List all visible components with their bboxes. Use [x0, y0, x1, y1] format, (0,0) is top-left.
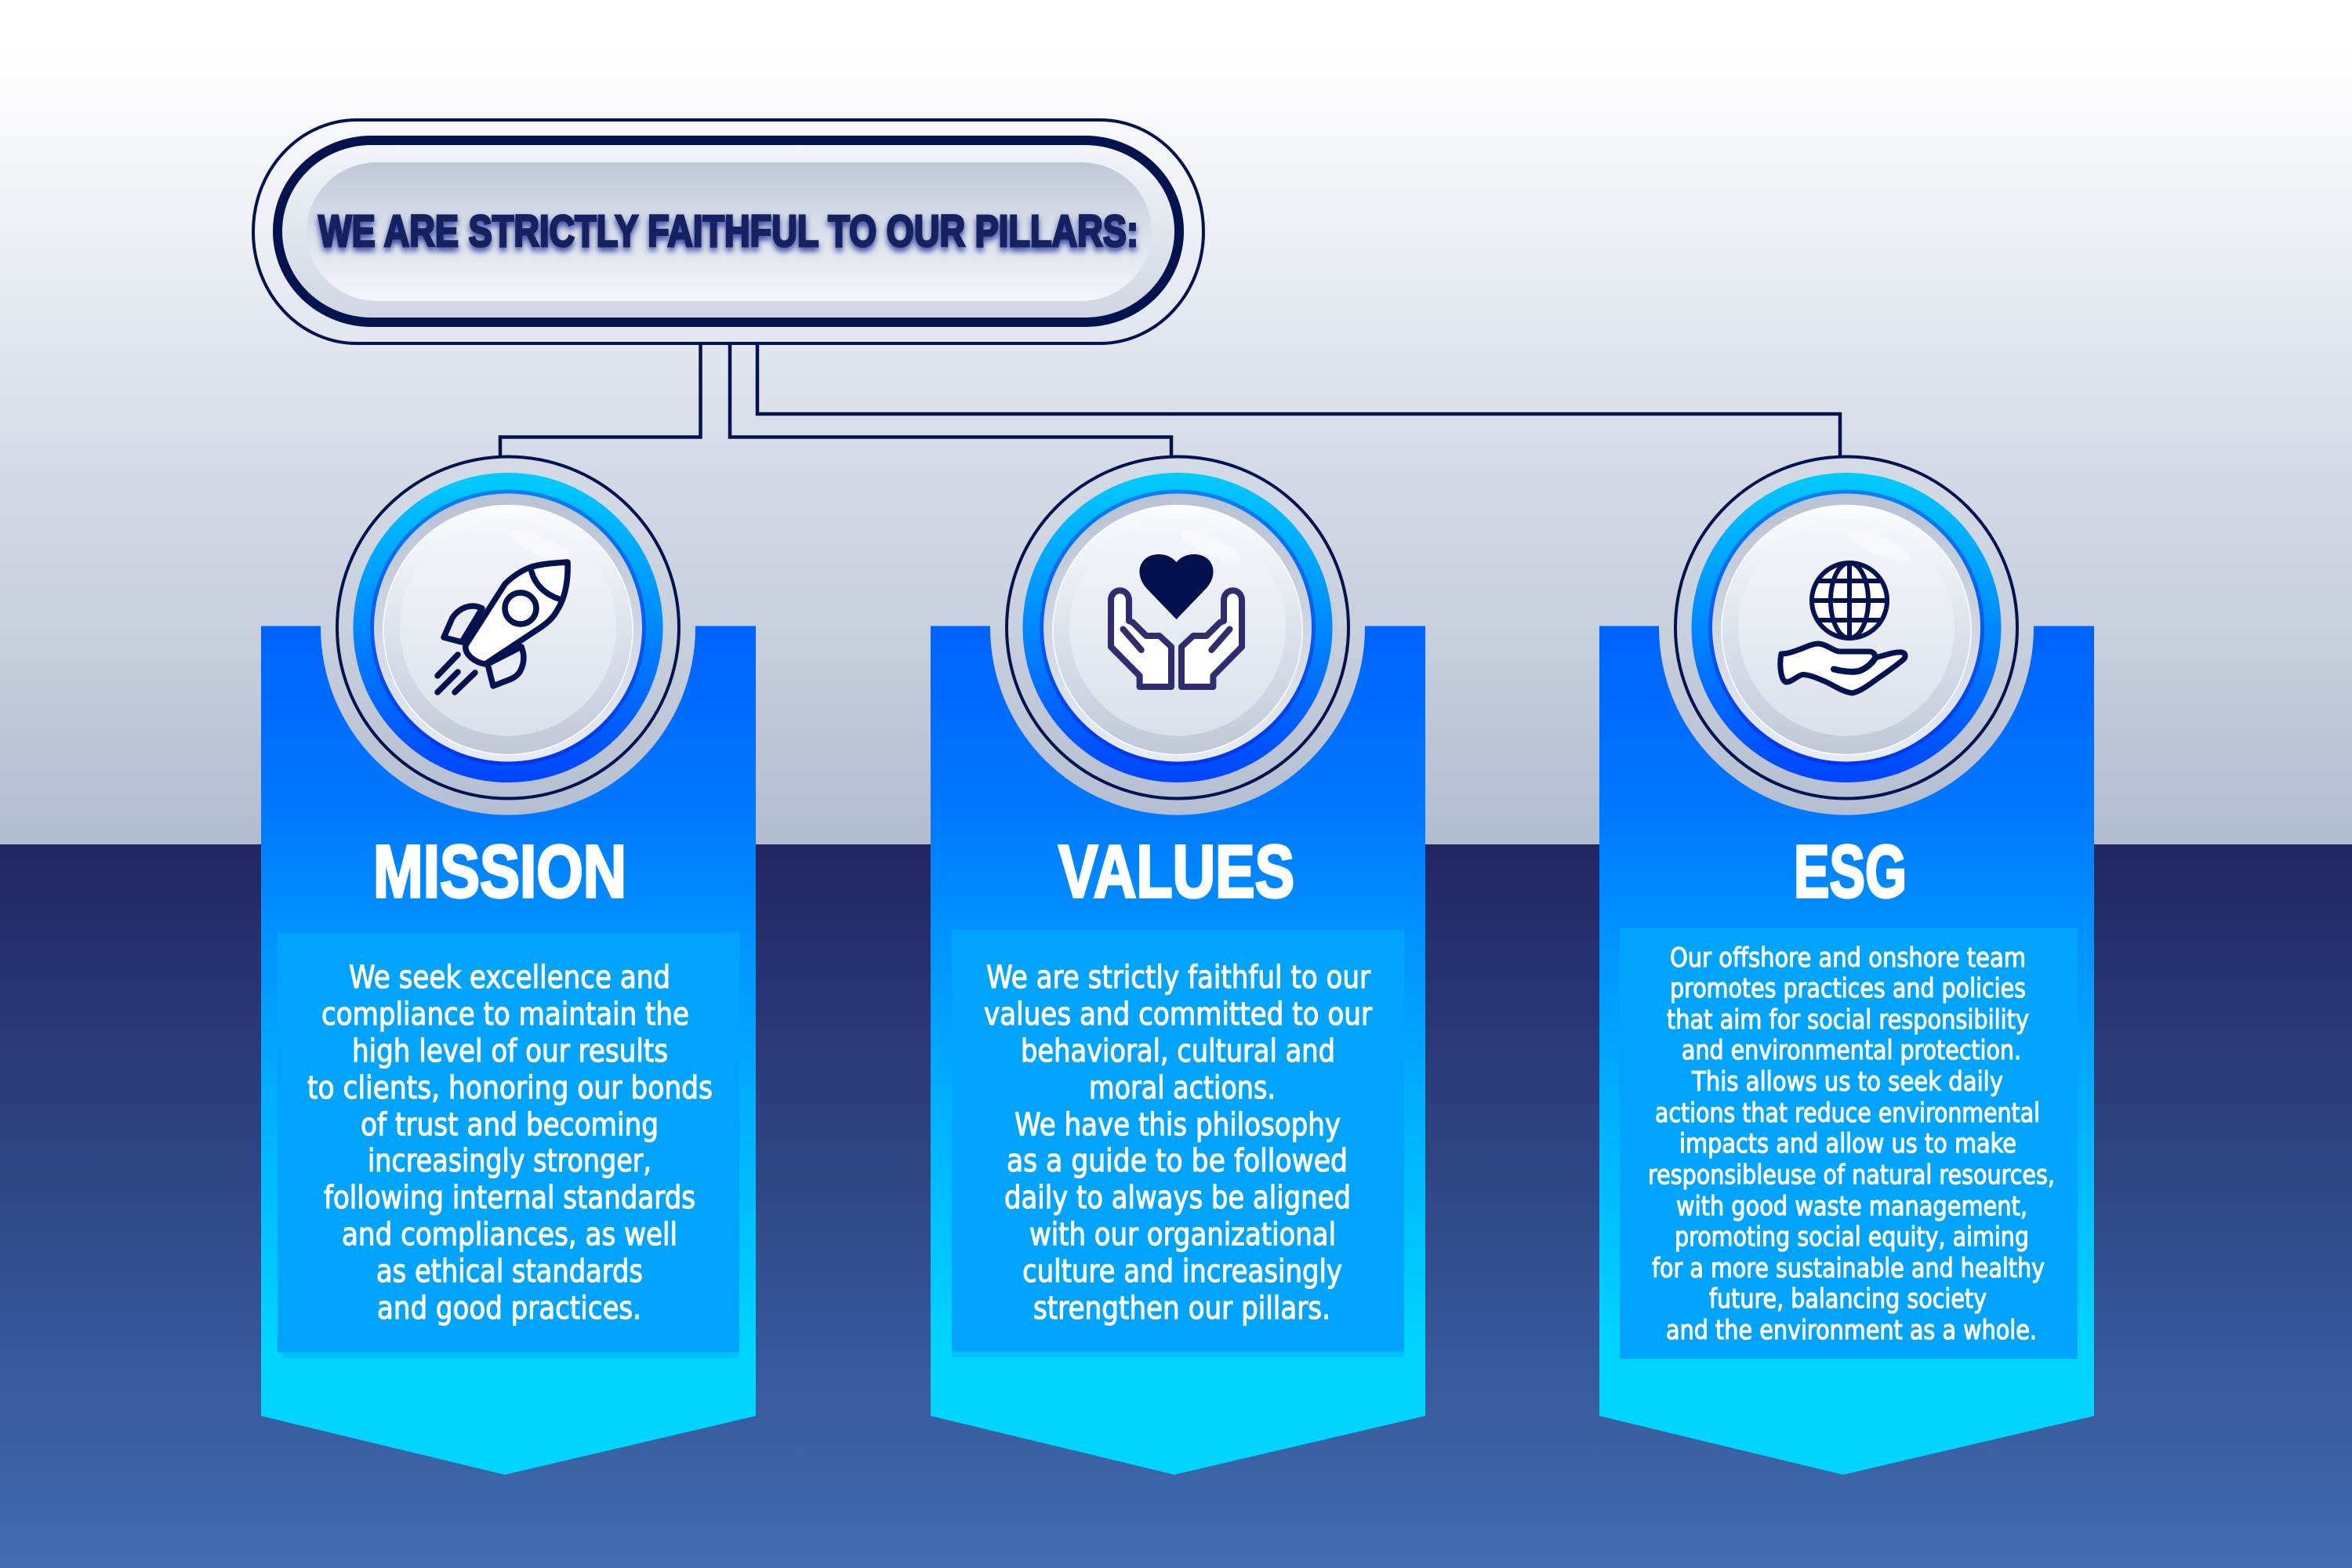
icon: rocket — [437, 562, 568, 692]
esg text panel: impacts and allow us to make — [1679, 1128, 2016, 1160]
values text panel: We have this philosophy — [1014, 1107, 1341, 1143]
mission heading: MISSION — [373, 830, 626, 913]
esg text panel: with good waste management, — [1676, 1191, 2027, 1222]
esg text panel: future, balancing society — [1709, 1283, 1987, 1315]
esg text panel: actions that reduce environmental — [1655, 1098, 2040, 1129]
connector lines from title to pillars — [500, 342, 1840, 458]
esg text panel: promotes practices and policies — [1670, 973, 2026, 1004]
mission text panel: to clients, honoring our bonds — [307, 1070, 713, 1106]
mission notch — [321, 441, 695, 815]
background: light upper band — [0, 0, 2352, 844]
esg text panel: and the environment as a whole. — [1666, 1315, 2037, 1346]
esg text panel — [1620, 928, 2078, 1359]
icon: heart in hands — [1111, 554, 1242, 687]
panel: mission — [261, 441, 756, 1475]
values text panel: as a guide to be followed — [1007, 1143, 1348, 1179]
mission banner — [261, 626, 756, 1475]
mission text panel: following internal standards — [324, 1180, 695, 1216]
values heading: VALUES — [1058, 830, 1294, 913]
esg heading: ESG — [1794, 830, 1907, 913]
esg text panel: This allows us to seek daily — [1691, 1066, 2003, 1098]
values banner — [931, 626, 1425, 1475]
esg text panel: that aim for social responsibility — [1667, 1004, 2029, 1036]
esg text panel: Our offshore and onshore team — [1670, 942, 2026, 974]
esg notch — [1659, 441, 2034, 815]
values notch — [990, 441, 1365, 815]
mission text panel: high level of our results — [352, 1033, 668, 1069]
esg text panel: for a more sustainable and healthy — [1652, 1253, 2045, 1284]
mission badge — [337, 456, 679, 798]
title pill — [253, 120, 1203, 343]
values text panel: We are strictly faithful to our — [986, 960, 1370, 996]
mission text panel: increasingly stronger, — [368, 1143, 652, 1179]
values badge — [1007, 456, 1348, 798]
mission text panel: as ethical standards — [376, 1254, 643, 1290]
values text panel: with our organizational — [1029, 1217, 1336, 1253]
mission text panel: We seek excellence and — [349, 960, 670, 996]
mission text panel: and compliances, as well — [342, 1217, 677, 1253]
panel: esg — [1599, 441, 2094, 1475]
values text panel: values and committed to our — [984, 996, 1372, 1033]
mission text panel: and good practices. — [377, 1290, 641, 1327]
values text panel: daily to always be aligned — [1004, 1180, 1351, 1216]
values text panel: strengthen our pillars. — [1033, 1290, 1330, 1327]
esg text panel: promoting social equity, aiming — [1675, 1221, 2029, 1253]
title text: WE ARE STRICTLY FAITHFUL TO OUR PILLARS: — [318, 206, 1138, 256]
mission text panel: compliance to maintain the — [321, 996, 689, 1033]
values text panel: moral actions. — [1089, 1070, 1276, 1106]
mission text panel: of trust and becoming — [361, 1107, 659, 1143]
mission text panel — [278, 933, 739, 1358]
esg banner — [1599, 626, 2094, 1475]
values text panel: behavioral, cultural and — [1021, 1033, 1335, 1069]
esg text panel: responsibleuse of natural resources, — [1648, 1160, 2055, 1191]
values text panel: culture and increasingly — [1022, 1254, 1342, 1290]
panel: values — [931, 441, 1425, 1475]
esg text panel: and environmental protection. — [1682, 1035, 2021, 1066]
values text panel — [952, 930, 1404, 1357]
esg badge — [1675, 456, 2017, 798]
background: navy lower band — [0, 844, 2352, 1568]
icon: globe over hand — [1780, 563, 1905, 693]
